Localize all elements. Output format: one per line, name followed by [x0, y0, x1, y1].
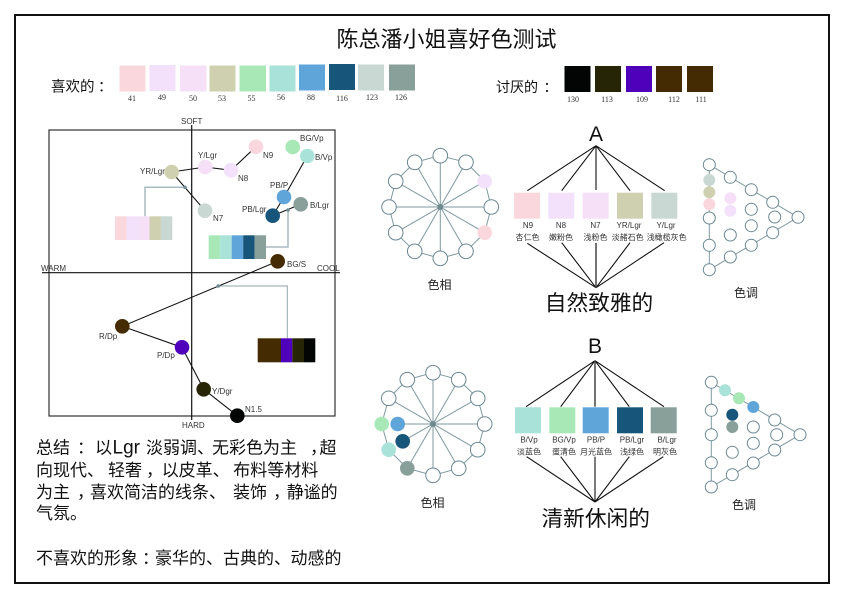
swatch captions B: 月光蓝色 [580, 446, 612, 456]
panel: liked colours [51, 64, 415, 103]
point labels: PB/Lgr [242, 205, 267, 214]
point labels: N9 [263, 151, 274, 160]
axis labels: HARD [182, 421, 205, 430]
lines from swatches to adjective A [527, 243, 664, 288]
panel: group A [514, 123, 687, 316]
swatch captions A: Y/Lgr [656, 221, 676, 230]
colour points [115, 139, 315, 423]
point labels: B/Lgr [310, 201, 329, 210]
summary text: Lgr [112, 438, 141, 458]
panel: disliked colours: 130 [567, 95, 579, 104]
panel: liked colours: 55 [248, 94, 256, 103]
swatches B [515, 407, 677, 433]
summary text: 轻奢 [108, 461, 142, 480]
swatches A [514, 193, 677, 219]
swatch captions B: 明灰色 [653, 446, 677, 456]
caption: hue B: 色相 [420, 496, 445, 510]
swatch captions A: YR/Lgr [617, 221, 642, 230]
swatch captions A: 淡赭石色 [612, 232, 644, 242]
lines from swatches to adjective B [527, 457, 663, 502]
tone triangle B [705, 376, 806, 512]
summary text: 无彩色为主 [212, 438, 297, 458]
chart: image scale [41, 117, 340, 430]
point labels: PB/P [270, 181, 288, 190]
axis labels: COOL [317, 264, 340, 273]
axis labels [41, 117, 340, 430]
summary text: 淡弱调、 [146, 438, 214, 458]
point labels: P/Dp [157, 351, 175, 360]
summary text: ， [146, 461, 163, 480]
panel: disliked colours: 111 [695, 95, 707, 104]
point labels: BG/S [287, 260, 306, 269]
lines from A to swatches [527, 146, 665, 191]
swatch captions B: 淡蓝色 [517, 446, 541, 456]
heading B: 清新休闲的 [541, 506, 650, 531]
point labels: R/Dp [99, 332, 118, 341]
swatch captions B: PB/Lgr [620, 436, 645, 444]
letter B: B [588, 335, 602, 358]
caption: tone A: 色调 [734, 286, 758, 300]
summary text: 布料等材料 [233, 461, 318, 480]
heading A: 自然致雅的 [545, 290, 653, 316]
summary text: 向现代、 [36, 461, 104, 480]
summary text: ， [273, 483, 290, 502]
summary text: 静谧的 [287, 483, 338, 502]
point labels: BG/Vp [300, 134, 324, 143]
panel: liked colours: 126 [395, 93, 407, 102]
swatch captions A: N7 [590, 221, 601, 230]
letter A: A [589, 123, 603, 146]
panel: liked colours: 116 [336, 94, 348, 103]
panel: liked colours: 53 [218, 94, 226, 103]
axis labels: SOFT [181, 117, 202, 126]
axis labels: WARM [41, 264, 66, 273]
point labels: N7 [213, 214, 224, 223]
label: disliked: ： [544, 79, 558, 95]
swatch captions B: B/Vp [520, 436, 538, 444]
panel: disliked colours: 112 [668, 95, 680, 104]
summary text: 超 [320, 438, 336, 458]
palette: disliked [258, 338, 315, 362]
summary text: 气氛。 [36, 504, 87, 523]
panel: liked colours: 123 [366, 93, 378, 102]
swatch captions A: 杏仁色 [516, 232, 540, 242]
summary text: 喜欢简洁的线条、 [90, 483, 226, 502]
panel: group B [515, 335, 677, 531]
swatch captions B [517, 436, 677, 456]
palette connectors [145, 187, 288, 338]
swatch captions B: PB/P [587, 436, 605, 444]
hue wheel A [382, 148, 499, 292]
swatch captions A: 浅橄榄灰色 [647, 232, 687, 242]
summary text: 为主 [36, 483, 70, 502]
summary text: 装饰 [233, 483, 267, 502]
swatch captions A: N9 [523, 221, 534, 230]
panel: liked colours: 50 [189, 94, 197, 103]
summary text: 总结 [36, 438, 70, 458]
point labels: B/Vp [315, 153, 333, 162]
summary text [36, 438, 338, 523]
label: disliked: 讨厌的 [496, 79, 538, 95]
panel: liked colours: 56 [277, 93, 285, 102]
point labels: YR/Lgr [140, 167, 165, 176]
summary text: ， [77, 483, 94, 502]
dislike statement: ： [142, 549, 159, 568]
swatch captions A: N8 [556, 221, 567, 230]
caption: hue A: 色相 [427, 278, 452, 292]
swatch captions B: B/Lgr [657, 436, 677, 444]
point labels: N1.5 [245, 405, 262, 414]
summary text: 以皮革、 [162, 461, 230, 480]
point labels: Y/Dgr [212, 387, 233, 396]
swatch captions A: 嫩粉色 [549, 232, 573, 242]
summary text: ， [310, 438, 327, 458]
dislike statement: 豪华的、 [155, 548, 223, 568]
summary text: 以 [95, 438, 112, 458]
dislike statement: 不喜欢的形象 [36, 549, 138, 568]
tone triangle A [703, 159, 804, 300]
swatch captions B: BG/Vp [552, 436, 576, 444]
panel: liked colours: 41 [128, 94, 136, 103]
panel: disliked colours [496, 66, 713, 104]
swatch captions A [516, 221, 687, 242]
swatch captions B: 蛋清色 [552, 446, 576, 456]
swatch captions A: 浅粉色 [584, 232, 608, 242]
caption: tone B: 色调 [732, 498, 756, 512]
summary text: ： [77, 438, 94, 458]
hue wheel B [374, 365, 492, 510]
panel: disliked colours: 109 [636, 95, 648, 104]
panel: liked colours: 88 [307, 93, 315, 102]
panel: liked colours: 49 [158, 93, 166, 102]
panel: disliked colours: 113 [601, 95, 613, 104]
dislike statement: 动感的 [290, 549, 342, 568]
label: liked: 喜欢的 [51, 80, 94, 96]
label: liked: ： [98, 80, 112, 96]
swatch captions B: 浅绿色 [620, 446, 644, 456]
palette: group A [115, 216, 172, 240]
point labels: Y/Lgr [198, 151, 217, 160]
connection lines [122, 147, 307, 416]
dislike statement: 古典的、 [223, 549, 291, 568]
title: 陈总潘小姐喜好色测试 [336, 27, 557, 52]
point labels: N8 [238, 174, 249, 183]
palette: group B [209, 235, 266, 259]
point labels [99, 134, 333, 414]
lines from B to swatches [526, 361, 664, 407]
